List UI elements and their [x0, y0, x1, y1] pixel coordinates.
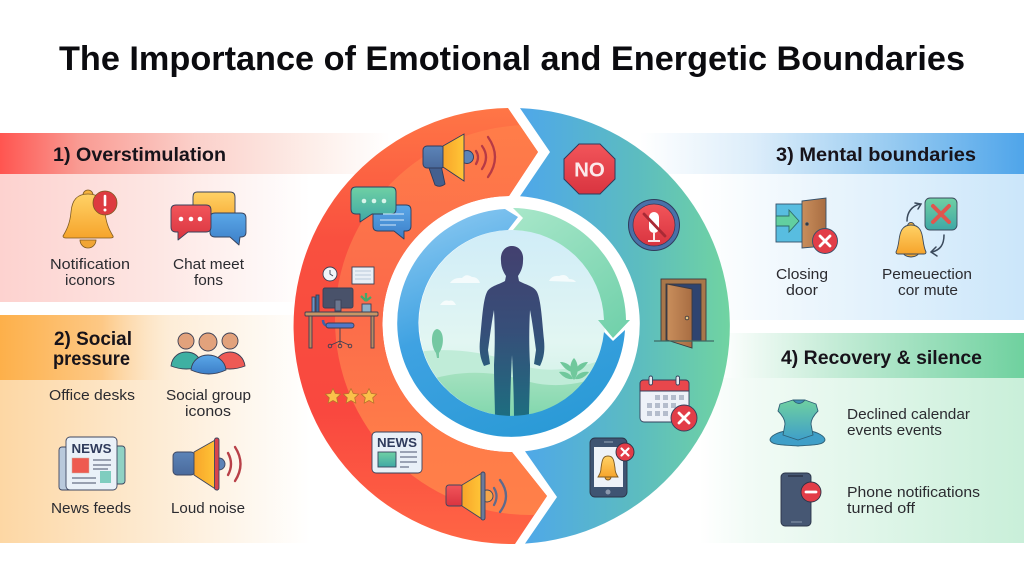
icon: social group [171, 333, 245, 374]
label: Declined calendar events events [847, 407, 970, 439]
figure: human silhouette [480, 246, 544, 418]
panel: 1) Overstimulation [0, 133, 390, 302]
icon: chat bubbles on ring [351, 187, 411, 239]
panel: 3) Mental boundaries [640, 133, 1024, 320]
icon: bell mute cycle [896, 198, 957, 257]
icon: rating stars [325, 388, 377, 403]
label: Phone notifications turned off [847, 485, 980, 517]
panel: 4) Recovery and silence [700, 333, 1024, 543]
label: News feeds: News feeds [51, 501, 131, 517]
icon: notification bell [63, 190, 117, 248]
icon: muted microphone [628, 200, 680, 250]
label: Chat meet fons: fons [194, 273, 223, 289]
label: Notification iconors: iconors [65, 273, 115, 289]
icon: meditating figure [770, 400, 825, 446]
icon: loud noise speaker [173, 438, 240, 490]
label: Pemeuection cor mute [882, 267, 972, 299]
scene: sky and hills [419, 230, 605, 416]
arrow: blue-green boundary arc [520, 108, 730, 544]
label: Pemeuection cor mute: Pemeuection [882, 267, 972, 283]
icon: phone with muted bell [590, 438, 634, 497]
heading: Overstimulation: 1) Overstimulation [53, 145, 226, 166]
label: Social group iconos: iconos [185, 404, 231, 420]
arrow: red stress arc [294, 108, 547, 544]
icon: megaphone [423, 134, 495, 186]
label: Notification iconors [50, 257, 130, 289]
title: The Importance of Emotional and Energetic Boundaries [59, 40, 965, 78]
icon: news card: NEWS [377, 435, 417, 450]
heading: Social pressure [53, 329, 132, 370]
cycle: outer ring [290, 100, 730, 550]
icon: news feed [59, 437, 125, 490]
label: Social group iconos: Social group [166, 388, 251, 404]
icon: news card [372, 432, 422, 473]
arrow: green inner ring [513, 208, 630, 338]
label: Closing door: door [786, 283, 818, 299]
label: Declined calendar events events: Declined calendar [847, 407, 970, 423]
heading: Mental boundaries: 3) Mental boundaries [776, 145, 976, 166]
label: Closing door [776, 267, 828, 299]
label: Declined calendar events events: events events [847, 423, 942, 439]
center: person in calm landscape [397, 208, 630, 437]
icon: NO stop sign [564, 144, 615, 194]
icon: NO stop sign: NO [574, 158, 605, 182]
icon: declined calendar [640, 376, 697, 431]
label: Phone notifications turned off: turned off [847, 501, 916, 517]
label: Chat meet fons: Chat meet [173, 257, 244, 273]
label: Chat meet fons [173, 257, 244, 289]
icon: phone with minus badge [781, 473, 821, 526]
label: Phone notifications turned off: Phone notifications [847, 485, 980, 501]
label: Social group iconos [166, 388, 251, 420]
label: Notification iconors: Notification [50, 257, 130, 273]
icon: office desk [305, 267, 378, 348]
panel: 2) Social pressure [0, 315, 310, 543]
heading: Recovery and silence: 4) Recovery & silence [781, 348, 982, 369]
label: Closing door: Closing [776, 267, 828, 283]
heading: Social pressure: pressure [53, 349, 130, 370]
label: Loud noise: Loud noise [171, 501, 245, 517]
icon: news feed: NEWS [72, 442, 112, 456]
arrow: blue inner ring [397, 209, 625, 437]
icon: open door [654, 279, 714, 348]
icon: chat bubbles [171, 192, 246, 245]
icon: speaker on ring [446, 472, 506, 520]
label: Pemeuection cor mute: cor mute [898, 283, 958, 299]
label: Office desks: Office desks [49, 388, 135, 404]
heading: Social pressure: 2) Social [54, 329, 132, 350]
icon: closing door [776, 198, 838, 254]
